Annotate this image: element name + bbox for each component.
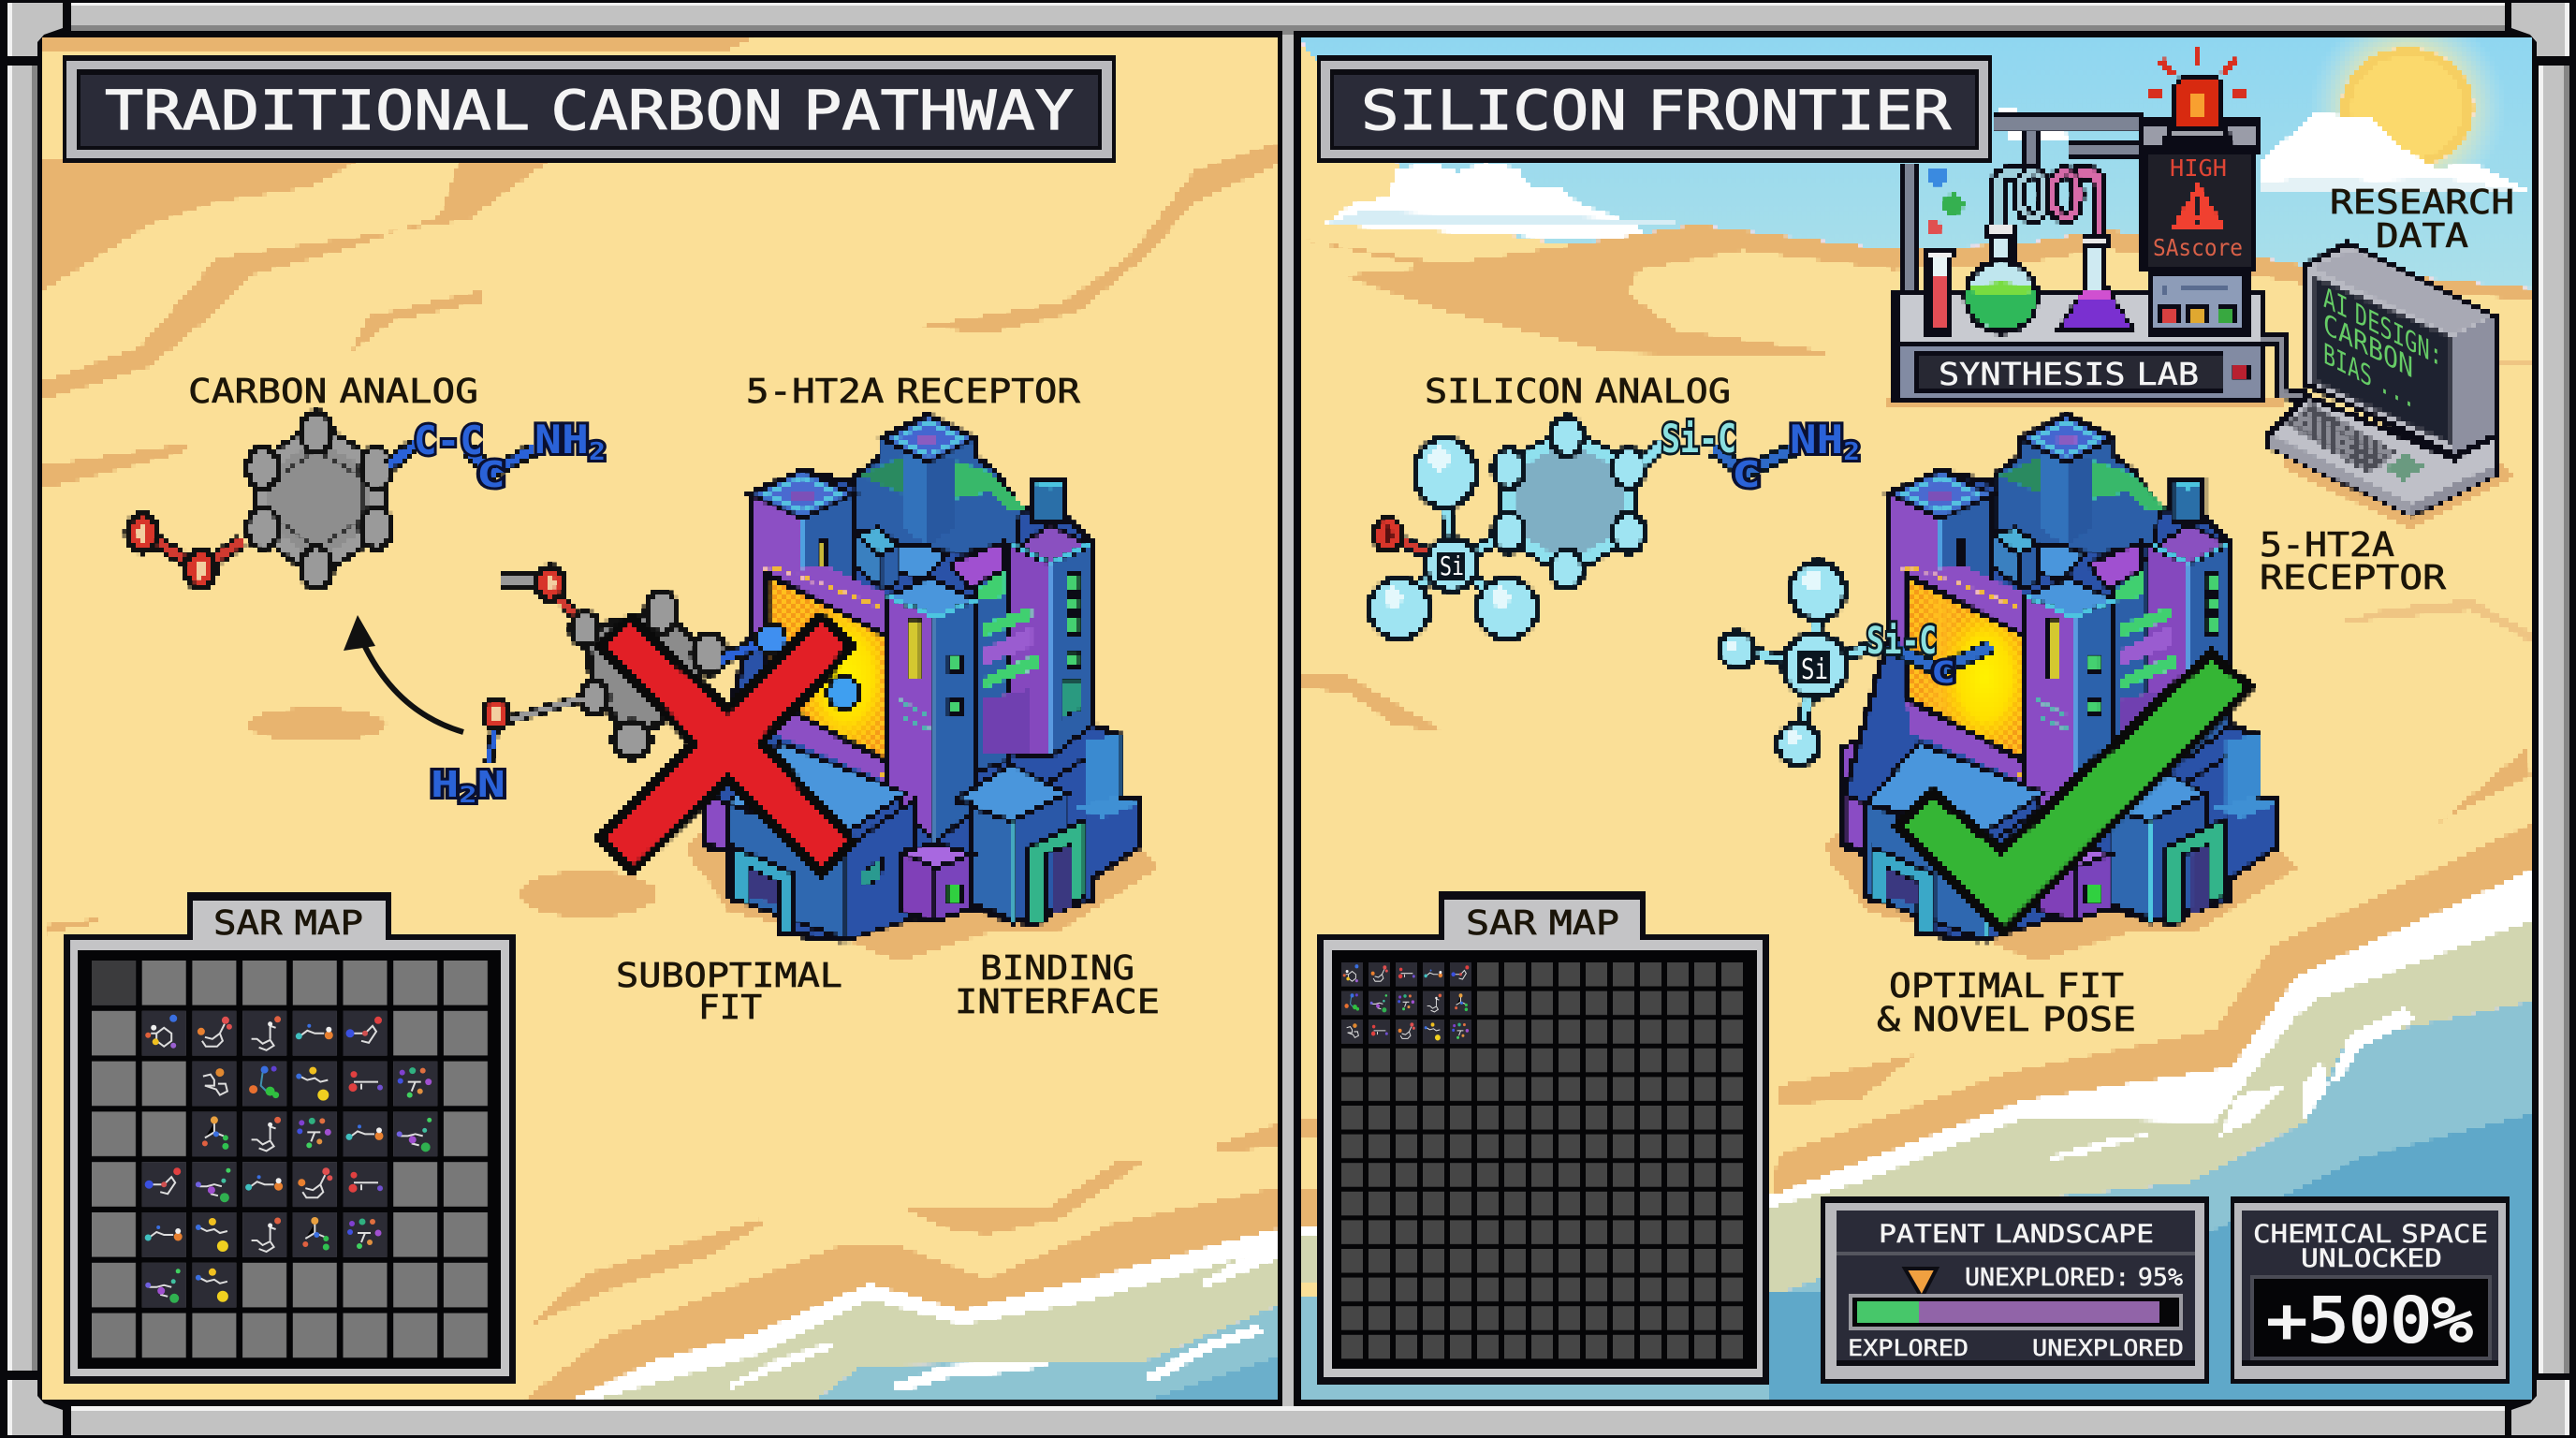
SAR explored molecules: [1341, 962, 1471, 1044]
computer terminal: [2269, 243, 2514, 529]
arrow: rotation of the carbon analog: [344, 615, 463, 732]
bar: explored vs unexplored: [1849, 1294, 2183, 1330]
bench: [1895, 293, 2262, 345]
alarm beacon: [2165, 128, 2231, 140]
label: silicon analog: SILICON ANALOG: [1425, 373, 1731, 411]
cable: [2262, 340, 2306, 396]
heading: traditional carbon pathway: TRADITIONAL CARBON PATHWAY: [105, 79, 1074, 142]
panel: chemical space unlocked: [2231, 1196, 2510, 1384]
molecule: docked carbon analog: [431, 566, 859, 808]
screen text: BIAS ...: [2323, 336, 2415, 416]
tubes and coils: [1998, 173, 2099, 239]
panel: SAR map, silicon: [1317, 891, 1769, 1385]
bubbles: [1928, 167, 1947, 185]
heading: silicon frontier: [1317, 55, 1992, 163]
heading: silicon frontier: SILICON FRONTIER: [1361, 79, 1951, 142]
molecule: carbon analog: 2: [589, 438, 606, 466]
molecule: carbon analog: NH: [534, 417, 582, 462]
label: SAR map: SAR MAP: [1466, 904, 1619, 943]
beach background: sky, sun, clouds, dunes and sea: [1299, 9, 2530, 1398]
label: synthesis lab: SYNTHESIS LAB: [1939, 356, 2199, 392]
molecule: silicon analog: Si-C: [1661, 416, 1736, 462]
molecule: silicon analog: 2: [1843, 438, 1860, 466]
label: chemical space unlocked: [2253, 1220, 2488, 1273]
panel: silicon frontier: [1299, 9, 2530, 1398]
marker: explored position: [1905, 1269, 1937, 1298]
SAR grid cells: [1341, 962, 1743, 1359]
synthesis lab: [1884, 49, 2306, 407]
label: chemical space unlocked: UNLOCKED: [2301, 1244, 2442, 1273]
molecule: docked silicon analog: [1720, 562, 1992, 765]
icon: green check: [1898, 653, 2249, 932]
label: 5-HT2A receptor: [2260, 526, 2446, 597]
label: optimal fit and novel pose: [1877, 967, 2136, 1039]
heading: traditional carbon pathway: [63, 55, 1116, 163]
molecule: docked silicon analog: C: [1931, 654, 1955, 690]
label: 5-HT2A receptor: 5-HT2A: [2260, 526, 2394, 565]
label: SAscore: SAscore: [2153, 234, 2243, 261]
SAR explored molecules: [142, 1011, 437, 1308]
round flask: [1992, 229, 2012, 276]
molecule: carbon analog: C: [476, 454, 505, 495]
label: explored: EXPLORED: [1848, 1335, 1969, 1361]
label: binding interface: BINDING: [980, 949, 1134, 988]
readout: +500%: +500%: [2266, 1284, 2473, 1357]
molecule: silicon analog: Si: [1440, 550, 1464, 581]
label: suboptimal fit: FIT: [698, 989, 762, 1027]
red button: [2232, 365, 2248, 380]
molecule: docked silicon analog: Si: [1801, 653, 1828, 686]
label: 5-HT2A receptor: 5-HT2A RECEPTOR: [746, 373, 1080, 411]
screen text: [2323, 280, 2442, 416]
molecule: silicon analog: NH: [1790, 417, 1837, 462]
SAR explored start cell: [92, 961, 136, 1005]
label: patent landscape: PATENT LANDSCAPE: [1879, 1220, 2154, 1249]
panel: patent landscape: [1821, 1196, 2209, 1384]
label: suboptimal fit: SUBOPTIMAL: [616, 957, 842, 995]
label: binding interface: INTERFACE: [955, 983, 1160, 1021]
molecule: silicon analog: C: [1732, 454, 1761, 495]
label: research data: [2330, 183, 2514, 256]
panel: SAR map, carbon: [64, 892, 516, 1384]
conical flask: [2060, 239, 2131, 328]
screen text: CARBON: [2323, 306, 2413, 385]
test tube: [1928, 253, 1949, 332]
label: suboptimal fit: [616, 957, 842, 1027]
icon: red cross: [601, 618, 853, 872]
label: carbon analog: CARBON ANALOG: [188, 373, 478, 411]
alarm tower: [2140, 122, 2257, 150]
label: optimal fit and novel pose: & NOVEL POSE: [1877, 1001, 2136, 1039]
label: unexplored percentage: UNEXPLORED: 95%: [1965, 1264, 2183, 1292]
panel: traditional carbon pathway: [44, 39, 1279, 1398]
molecule: docked carbon analog: H: [431, 764, 452, 805]
label: chemical space unlocked: CHEMICAL SPACE: [2253, 1220, 2488, 1249]
molecule: carbon analog: C-C: [414, 418, 483, 463]
molecule: carbon analog: [127, 412, 606, 588]
label: SAR map: SAR MAP: [213, 904, 363, 943]
receptor: carbon side: [688, 415, 1158, 961]
readout: +500%: [2250, 1275, 2492, 1360]
molecule: silicon analog: [1369, 416, 1860, 638]
molecule: docked carbon analog: N: [477, 764, 505, 805]
screen text: AI DESIGN:: [2323, 280, 2442, 374]
label: 5-HT2A receptor: RECEPTOR: [2260, 559, 2446, 597]
pipes: [1910, 124, 2144, 337]
label: unexplored: UNEXPLORED: [2032, 1335, 2184, 1361]
label: binding interface: [955, 949, 1160, 1021]
label: research data: RESEARCH: [2330, 183, 2514, 222]
label: research data: DATA: [2376, 217, 2468, 256]
molecule: docked carbon analog: 2: [459, 782, 477, 808]
molecule: docked silicon analog: Si-C: [1866, 620, 1937, 663]
label: high: HIGH: [2170, 154, 2227, 182]
sand background with swirls: [44, 39, 1279, 1398]
receptor: silicon side: [1826, 415, 2296, 961]
SAR grid cells: [92, 961, 490, 1358]
label: optimal fit and novel pose: OPTIMAL FIT: [1889, 967, 2124, 1005]
